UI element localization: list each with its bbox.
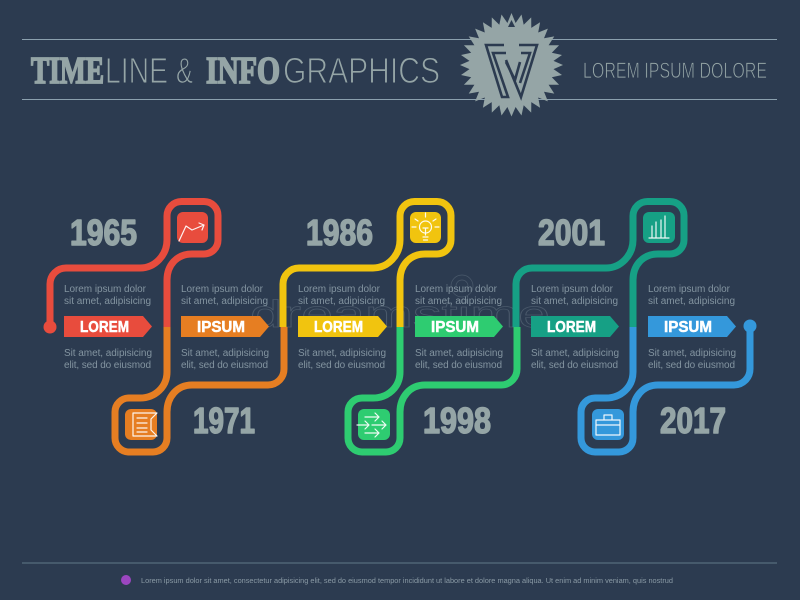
icon: document — [125, 409, 157, 440]
column 6 blue: Lorem ipsum dolor — [648, 284, 731, 295]
header rules — [22, 40, 777, 100]
column 6 blue — [648, 284, 736, 371]
column 5 teal: LOREM — [547, 319, 596, 336]
column 3 yellow: LOREM — [314, 319, 363, 336]
icon: bar chart — [643, 212, 675, 243]
column 5 teal: Sit amet, adipisicing — [531, 348, 619, 359]
year 2001: 2001 — [538, 212, 605, 253]
column 3 yellow: Sit amet, adipisicing — [298, 348, 386, 359]
icon: briefcase — [592, 409, 624, 440]
start dot — [44, 320, 56, 334]
column 5 teal: sit amet, adipisicing — [531, 296, 618, 307]
column 4 green — [415, 284, 503, 371]
icon: line chart — [177, 212, 208, 243]
column 4 green: Lorem ipsum dolor — [415, 284, 498, 295]
column 6 blue: sit amet, adipisicing — [648, 296, 735, 307]
timeline segment 2017 blue — [581, 327, 750, 452]
column 1 red: Lorem ipsum dolor — [64, 284, 147, 295]
column 1 red: sit amet, adipisicing — [64, 296, 151, 307]
column 1 red: LOREM — [80, 319, 129, 336]
timeline segment 1971 orange — [115, 327, 284, 452]
title: LINE — [105, 50, 168, 91]
timeline segment 1986 yellow — [283, 202, 451, 327]
watermark — [250, 275, 550, 336]
year 2017: 2017 — [660, 400, 726, 441]
timeline segment 2001 teal — [516, 202, 684, 327]
year 1998: 1998 — [423, 400, 491, 441]
footer purple dot — [121, 575, 131, 585]
title: GRAPHICS — [283, 50, 440, 91]
column 4 green: Sit amet, adipisicing — [415, 348, 503, 359]
column 5 teal: elit, sed do eiusmod — [531, 360, 618, 371]
column 6 blue: IPSUM — [664, 319, 712, 336]
column 3 yellow: elit, sed do eiusmod — [298, 360, 385, 371]
column 4 green: sit amet, adipisicing — [415, 296, 502, 307]
icon: arrows — [357, 409, 390, 440]
column 6 blue: elit, sed do eiusmod — [648, 360, 735, 371]
footer text: Lorem ipsum dolor sit amet, consectetur adipisicing elit, sed do eiusmod tempor incididunt ut labore et dolore magna aliqua. Ut enim ad minim veniam, quis nostrud — [141, 578, 673, 585]
column 2 orange: elit, sed do eiusmod — [181, 360, 268, 371]
timeline segment 1965 red — [50, 202, 218, 327]
title — [31, 50, 440, 92]
column 5 teal — [531, 284, 619, 371]
column 1 red: elit, sed do eiusmod — [64, 360, 151, 371]
year 1965: 1965 — [70, 212, 137, 253]
column 5 teal: Lorem ipsum dolor — [531, 284, 614, 295]
column 2 orange: Sit amet, adipisicing — [181, 348, 269, 359]
title: TIME — [31, 50, 104, 92]
column 2 orange: Lorem ipsum dolor — [181, 284, 264, 295]
icon: light bulb — [410, 212, 441, 243]
title: & — [176, 50, 193, 91]
title: INFO — [206, 50, 280, 92]
column 3 yellow: Lorem ipsum dolor — [298, 284, 381, 295]
column 2 orange: IPSUM — [197, 319, 245, 336]
column 1 red — [64, 284, 152, 371]
timeline segment 1998 green — [348, 327, 517, 452]
column 4 green: elit, sed do eiusmod — [415, 360, 502, 371]
badge logo — [460, 13, 563, 116]
watermark: dreamstime — [250, 294, 550, 336]
column 2 orange: sit amet, adipisicing — [181, 296, 268, 307]
end dot — [744, 320, 756, 332]
year 1986: 1986 — [306, 212, 373, 253]
footer rule — [22, 562, 777, 564]
year 1971: 1971 — [193, 400, 255, 441]
column 4 green: IPSUM — [431, 319, 479, 336]
column 3 yellow — [298, 284, 387, 371]
column 3 yellow: sit amet, adipisicing — [298, 296, 385, 307]
column 1 red: Sit amet, adipisicing — [64, 348, 152, 359]
column 6 blue: Sit amet, adipisicing — [648, 348, 736, 359]
column 2 orange — [181, 284, 269, 371]
